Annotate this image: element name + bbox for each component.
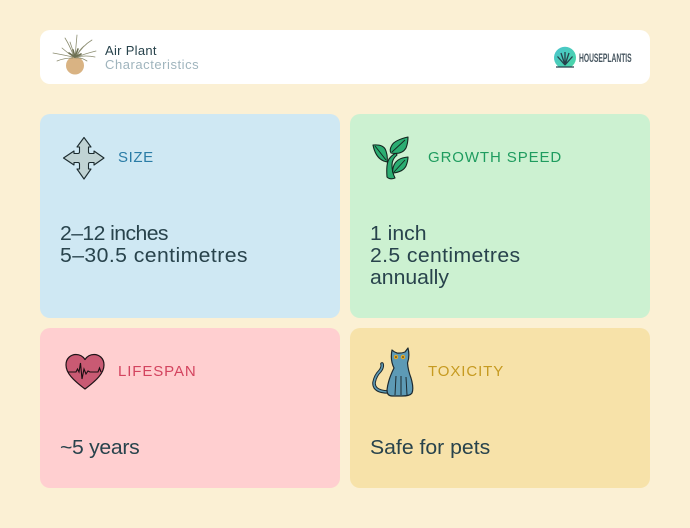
icon: air plant in pot bbox=[52, 34, 96, 74]
header bar bbox=[40, 30, 650, 84]
toxicity value: Safe for pets bbox=[370, 437, 490, 459]
title: Air Plant bbox=[105, 43, 157, 58]
icon: heart with pulse bbox=[65, 354, 105, 390]
growth values: 1 inch bbox=[370, 223, 427, 245]
subtitle: Characteristics bbox=[105, 57, 199, 72]
panel: toxicity bbox=[350, 328, 650, 488]
panel: size bbox=[40, 114, 340, 318]
panel: lifespan bbox=[40, 328, 340, 488]
growth values: 2.5 centimetres bbox=[370, 245, 521, 267]
lifespan value: ~5 years bbox=[60, 437, 139, 459]
heading: toxicity: TOXICITY bbox=[428, 363, 504, 380]
growth values: annually bbox=[370, 267, 449, 289]
size values: 2–12 inches bbox=[60, 223, 168, 245]
logo: Houseplantis: HOUSEPLANTIS bbox=[579, 51, 632, 65]
size values: 5–30.5 centimetres bbox=[60, 245, 248, 267]
heading: lifespan: LIFESPAN bbox=[118, 363, 197, 380]
size values bbox=[60, 223, 248, 267]
logo: Houseplantis bbox=[554, 46, 632, 68]
icon: four-way arrows bbox=[63, 136, 104, 180]
heading: growth speed: GROWTH SPEED bbox=[428, 149, 562, 166]
icon: leafy sprout bbox=[372, 136, 409, 180]
icon: blue cat bbox=[372, 347, 414, 397]
growth values bbox=[370, 223, 521, 289]
heading: size: SIZE bbox=[118, 149, 154, 166]
panel: growth speed bbox=[350, 114, 650, 318]
